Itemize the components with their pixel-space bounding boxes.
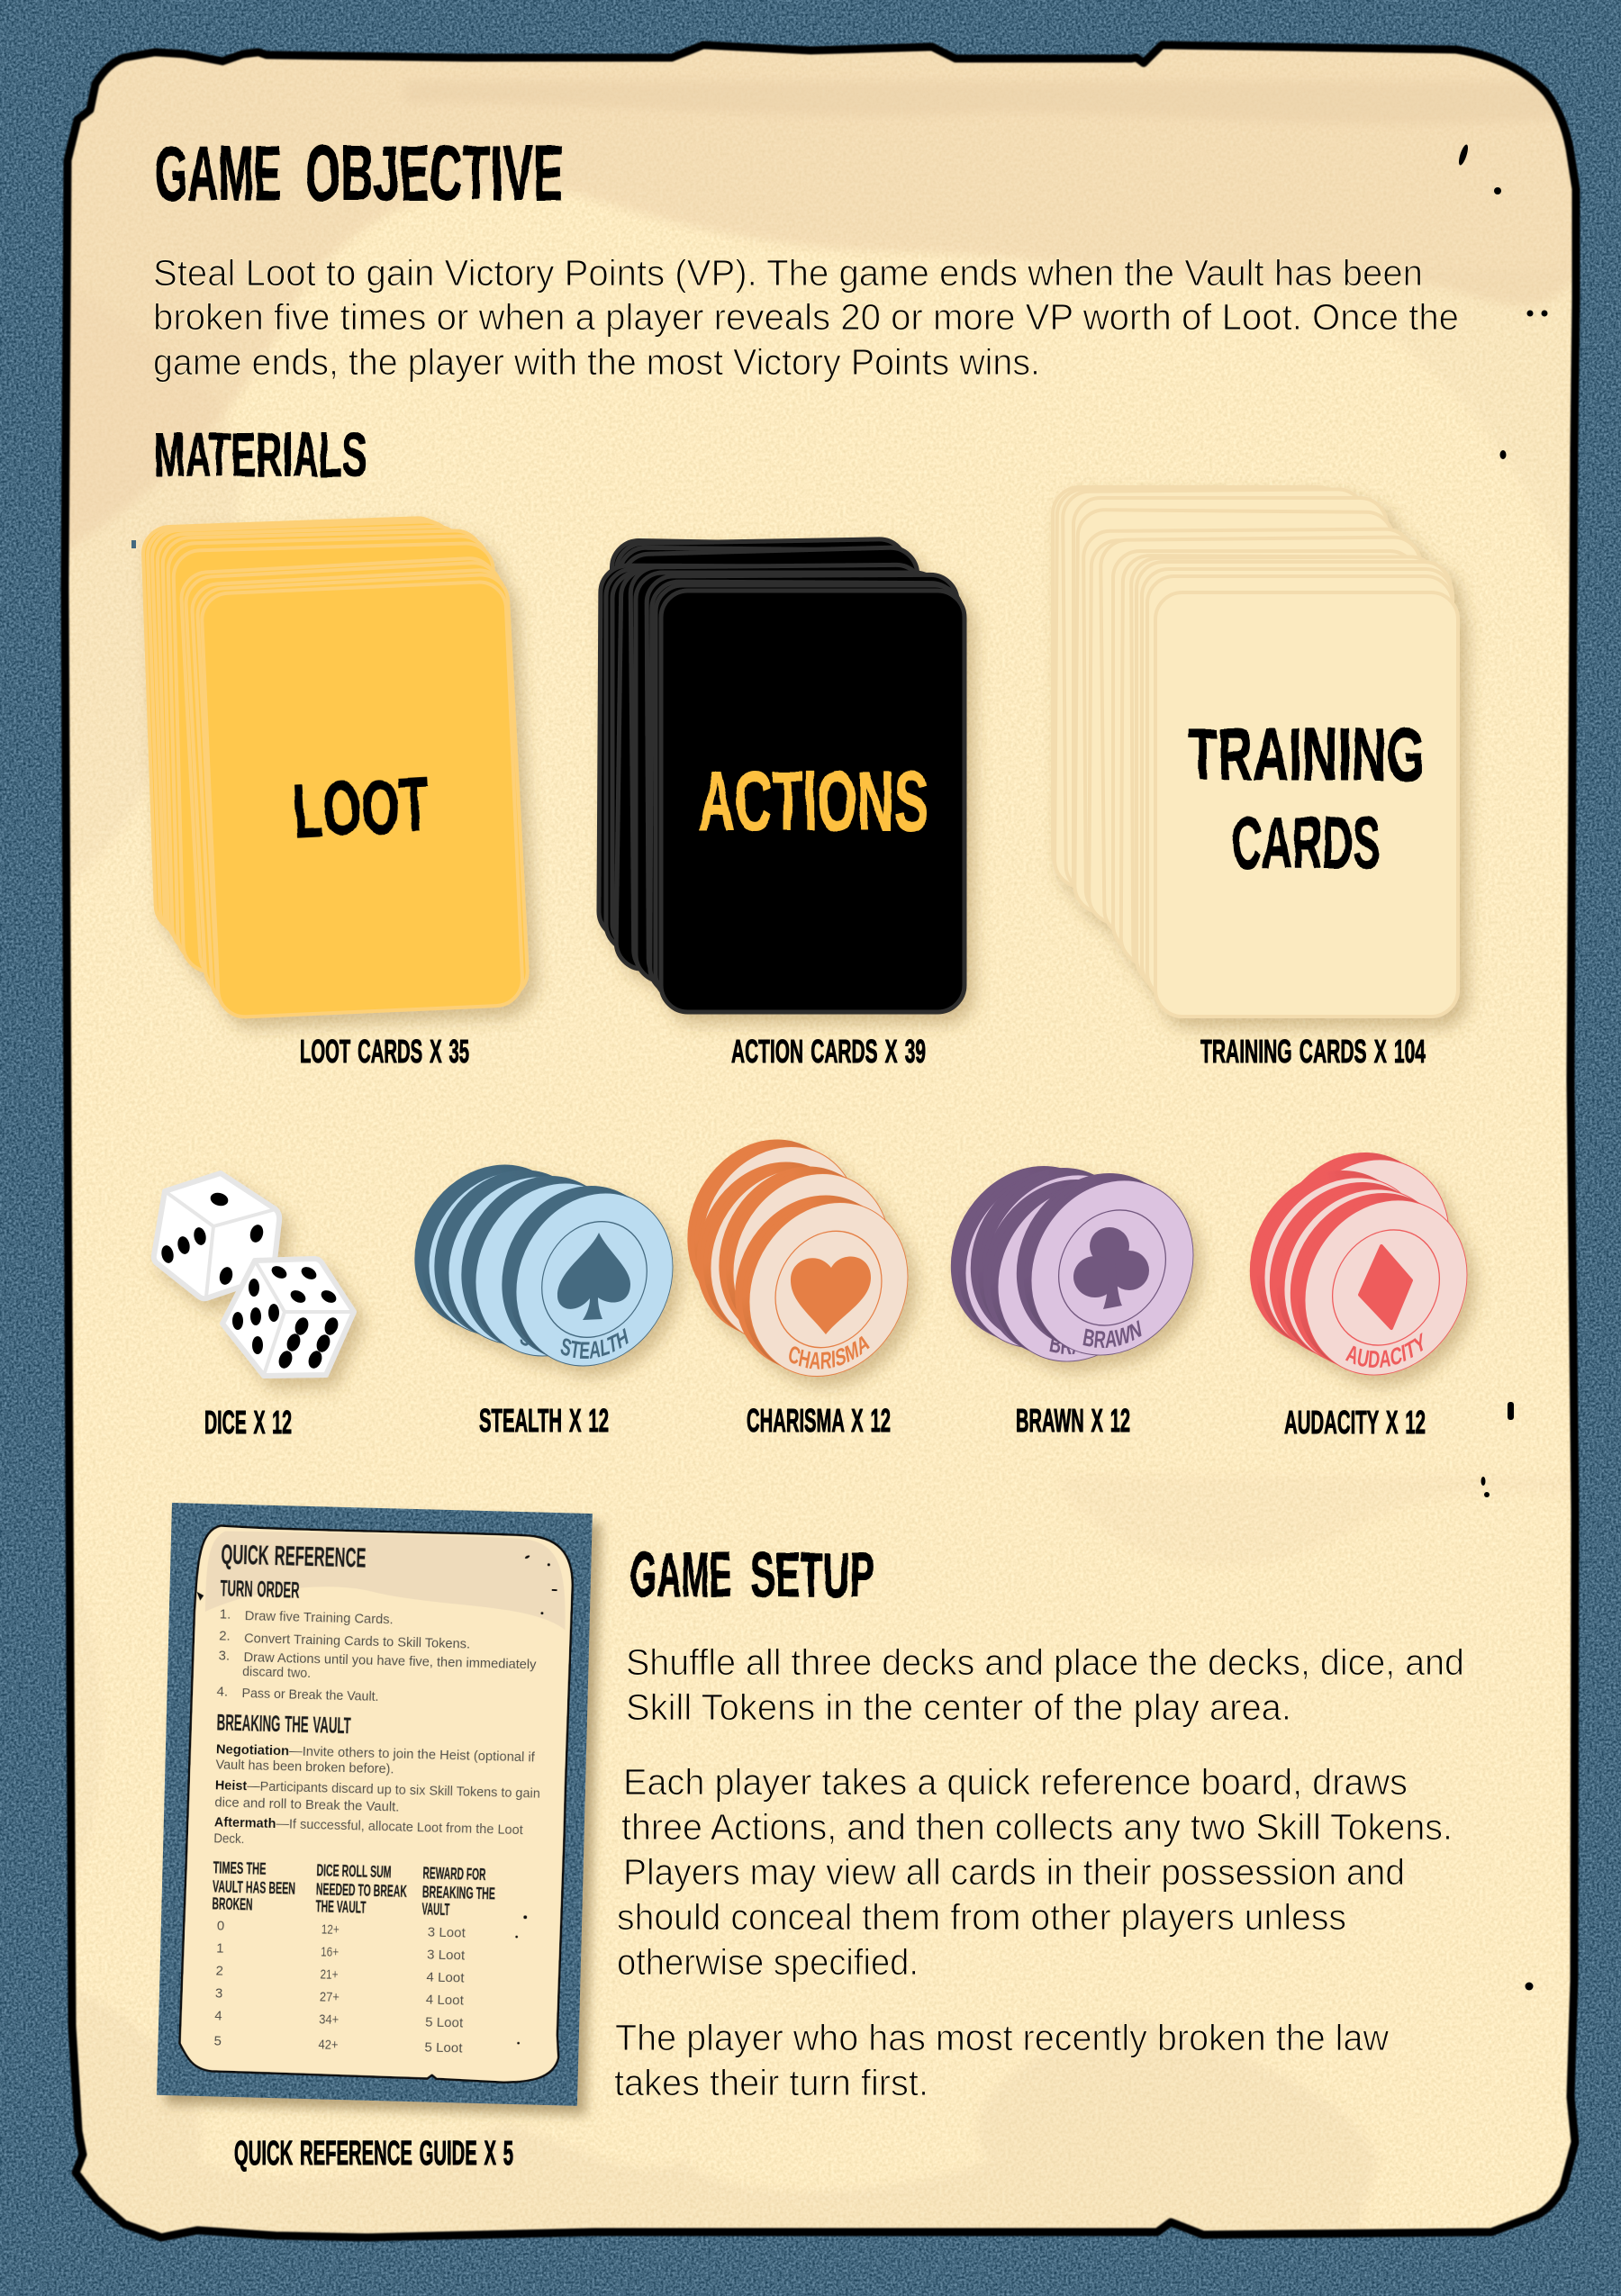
table: vault rewards: THE VAULT — [315, 1897, 367, 1917]
token stack: audacity — [1250, 1138, 1467, 1389]
table: vault rewards: 5 Loot — [424, 2039, 464, 2056]
card heading: turn order: TURN ORDER — [220, 1576, 300, 1604]
action card deck — [599, 538, 964, 1012]
front charisma token: CHARISMA — [789, 1336, 870, 1369]
text block: setup step one: Shuffle all three decks and place the decks, dice, and — [626, 1641, 1464, 1683]
table: vault rewards: 2 — [215, 1963, 223, 1979]
heading: game objective: OBJECTIVE — [305, 131, 564, 217]
table: vault rewards: 21+ — [320, 1966, 339, 1983]
card title: training cards — [1188, 714, 1425, 884]
table: vault rewards: 5 Loot — [425, 2014, 464, 2031]
front stealth token — [502, 1186, 690, 1385]
breaking the vault text: dice and roll to Break the Vault. — [214, 1794, 400, 1815]
turn order list: Pass or Break the Vault. — [241, 1686, 379, 1704]
token stack: charisma — [686, 1140, 926, 1396]
panel: quick reference card — [157, 1503, 593, 2106]
card title: training cards: TRAINING — [1188, 714, 1425, 796]
token stack: brawn: BRAWN — [1015, 1306, 1078, 1351]
token stack: stealth — [414, 1165, 690, 1385]
table: vault rewards: 3 Loot — [428, 1924, 466, 1941]
text block: setup step two — [617, 1761, 1453, 1983]
text block: objective: game ends, the player with the most Victory Points wins. — [153, 341, 1040, 383]
table: vault rewards: 4 — [214, 2008, 222, 2024]
text block: setup step two: Players may view all cards in their possession and — [623, 1851, 1405, 1893]
icon: club — [1073, 1227, 1149, 1309]
table: vault rewards: 1 — [216, 1940, 224, 1957]
table: vault rewards: NEEDED TO BREAK — [316, 1880, 407, 1901]
label: dice: DICE X 12 — [204, 1404, 292, 1441]
breaking the vault text: Vault has been broken before). — [215, 1757, 394, 1776]
text block: setup step two: three Actions, and then collects any two Skill Tokens. — [621, 1806, 1453, 1848]
table: vault rewards: 4 Loot — [426, 1969, 466, 1986]
die one — [154, 1173, 279, 1298]
front brawn token: BRAWN — [1082, 1320, 1142, 1349]
card heading: breaking the vault: BREAKING THE VAULT — [216, 1710, 351, 1739]
text block: objective: broken five times or when a player reveals 20 or more VP worth of Loot. Once the — [153, 296, 1459, 338]
icon: spade — [557, 1233, 630, 1320]
breaking the vault text: Deck. — [213, 1830, 245, 1847]
table: vault rewards: 0 — [217, 1918, 224, 1934]
table: vault rewards: 3 Loot — [427, 1947, 466, 1964]
turn order list — [216, 1606, 538, 1709]
table: vault rewards: 16+ — [321, 1944, 340, 1960]
table: vault rewards: 5 — [213, 2033, 222, 2049]
card title: training cards: CARDS — [1232, 802, 1381, 884]
text block: setup step two: should conceal them from other players unless — [617, 1896, 1346, 1938]
heading: game objective: GAME — [155, 131, 282, 217]
breaking the vault text — [213, 1741, 541, 1855]
loot card deck — [142, 517, 529, 1018]
label: loot cards: LOOT CARDS X 35 — [300, 1033, 469, 1070]
label: training cards: TRAINING CARDS X 104 — [1200, 1033, 1426, 1070]
breaking the vault text: Negotiation—Invite others to join the Heist (optional if — [216, 1741, 536, 1766]
card heading: quick reference: QUICK REFERENCE — [221, 1538, 367, 1574]
turn order list: Convert Training Cards to Skill Tokens. — [244, 1631, 470, 1652]
table: vault rewards: DICE ROLL SUM — [316, 1861, 392, 1881]
table: vault rewards: 12+ — [321, 1921, 340, 1938]
text block: setup step two: otherwise specified. — [617, 1941, 919, 1983]
die two — [222, 1259, 354, 1376]
token stack: brawn — [950, 1166, 1210, 1381]
icon: dice — [154, 1173, 354, 1376]
turn order list: 3. — [218, 1648, 230, 1664]
heading: materials: MATERIALS — [154, 420, 367, 490]
table: vault rewards: 27+ — [320, 1989, 340, 2005]
table: vault rewards — [208, 1858, 496, 2056]
text block: setup step two: Each player takes a quick reference board, draws — [623, 1761, 1408, 1803]
front audacity token: AUDACITY — [1345, 1333, 1423, 1368]
card title: actions: ACTIONS — [698, 754, 928, 848]
table: vault rewards: REWARD FOR — [422, 1864, 486, 1884]
front charisma token — [735, 1196, 926, 1396]
label: brawn: BRAWN X 12 — [1016, 1402, 1130, 1439]
turn order list: 1. — [220, 1606, 231, 1623]
training card deck — [1053, 487, 1458, 1017]
turn order list: Draw Actions until you have five, then immediately — [243, 1650, 537, 1673]
turn order list: Draw five Training Cards. — [245, 1608, 394, 1627]
label: stealth: STEALTH X 12 — [479, 1402, 609, 1439]
table: vault rewards: 4 Loot — [426, 1992, 465, 2009]
breaking the vault text: Heist—Participants discard up to six Skill Tokens to gain — [215, 1777, 540, 1802]
text block: setup step one: Skill Tokens in the center of the play area. — [626, 1686, 1291, 1728]
front stealth token: STEALTH — [560, 1328, 629, 1359]
text block: setup step one — [626, 1641, 1464, 1728]
turn order list: 2. — [219, 1628, 231, 1644]
front brawn token — [1017, 1159, 1193, 1369]
label: quick reference guide: QUICK REFERENCE GUIDE X 5 — [234, 2135, 513, 2173]
ink specks — [131, 144, 1547, 1990]
table: vault rewards: 34+ — [319, 2011, 340, 2028]
heading: game objective — [155, 131, 564, 217]
card title: loot: LOOT — [291, 762, 431, 854]
label: action cards: ACTION CARDS X 39 — [731, 1033, 926, 1070]
token stack: stealth: STEALTH — [521, 1340, 533, 1348]
icon: diamond — [1360, 1246, 1411, 1328]
front audacity token — [1290, 1179, 1467, 1389]
icon: heart — [791, 1257, 871, 1334]
table: vault rewards: BREAKING THE — [422, 1883, 495, 1903]
turn order list: 4. — [216, 1684, 228, 1700]
turn order list: discard two. — [242, 1664, 311, 1681]
breaking the vault text: Aftermath—If successful, allocate Loot from the Loot — [214, 1814, 524, 1838]
text block: objective: Steal Loot to gain Victory Points (VP). The game ends when the Vault has been — [153, 252, 1423, 294]
heading: game setup: GAME — [630, 1540, 732, 1610]
label: charisma: CHARISMA X 12 — [747, 1402, 891, 1439]
text block: setup step three — [614, 2017, 1389, 2103]
text block: objective — [153, 252, 1459, 383]
table: vault rewards: VAULT — [421, 1900, 450, 1919]
table: vault rewards: BROKEN — [212, 1894, 253, 1913]
table: vault rewards: 3 — [215, 1985, 223, 2002]
card specks — [186, 1546, 558, 2045]
table: vault rewards: VAULT HAS BEEN — [213, 1877, 295, 1898]
text block: setup step three: The player who has most recently broken the law — [615, 2017, 1389, 2058]
heading: game setup: SETUP — [750, 1540, 874, 1610]
table: vault rewards: 42+ — [318, 2037, 339, 2053]
text block: setup step three: takes their turn first. — [614, 2062, 928, 2103]
label: audacity: AUDACITY X 12 — [1284, 1404, 1426, 1441]
table: vault rewards: TIMES THE — [213, 1858, 267, 1878]
token stack: brawn: BRAWN — [1050, 1339, 1082, 1354]
